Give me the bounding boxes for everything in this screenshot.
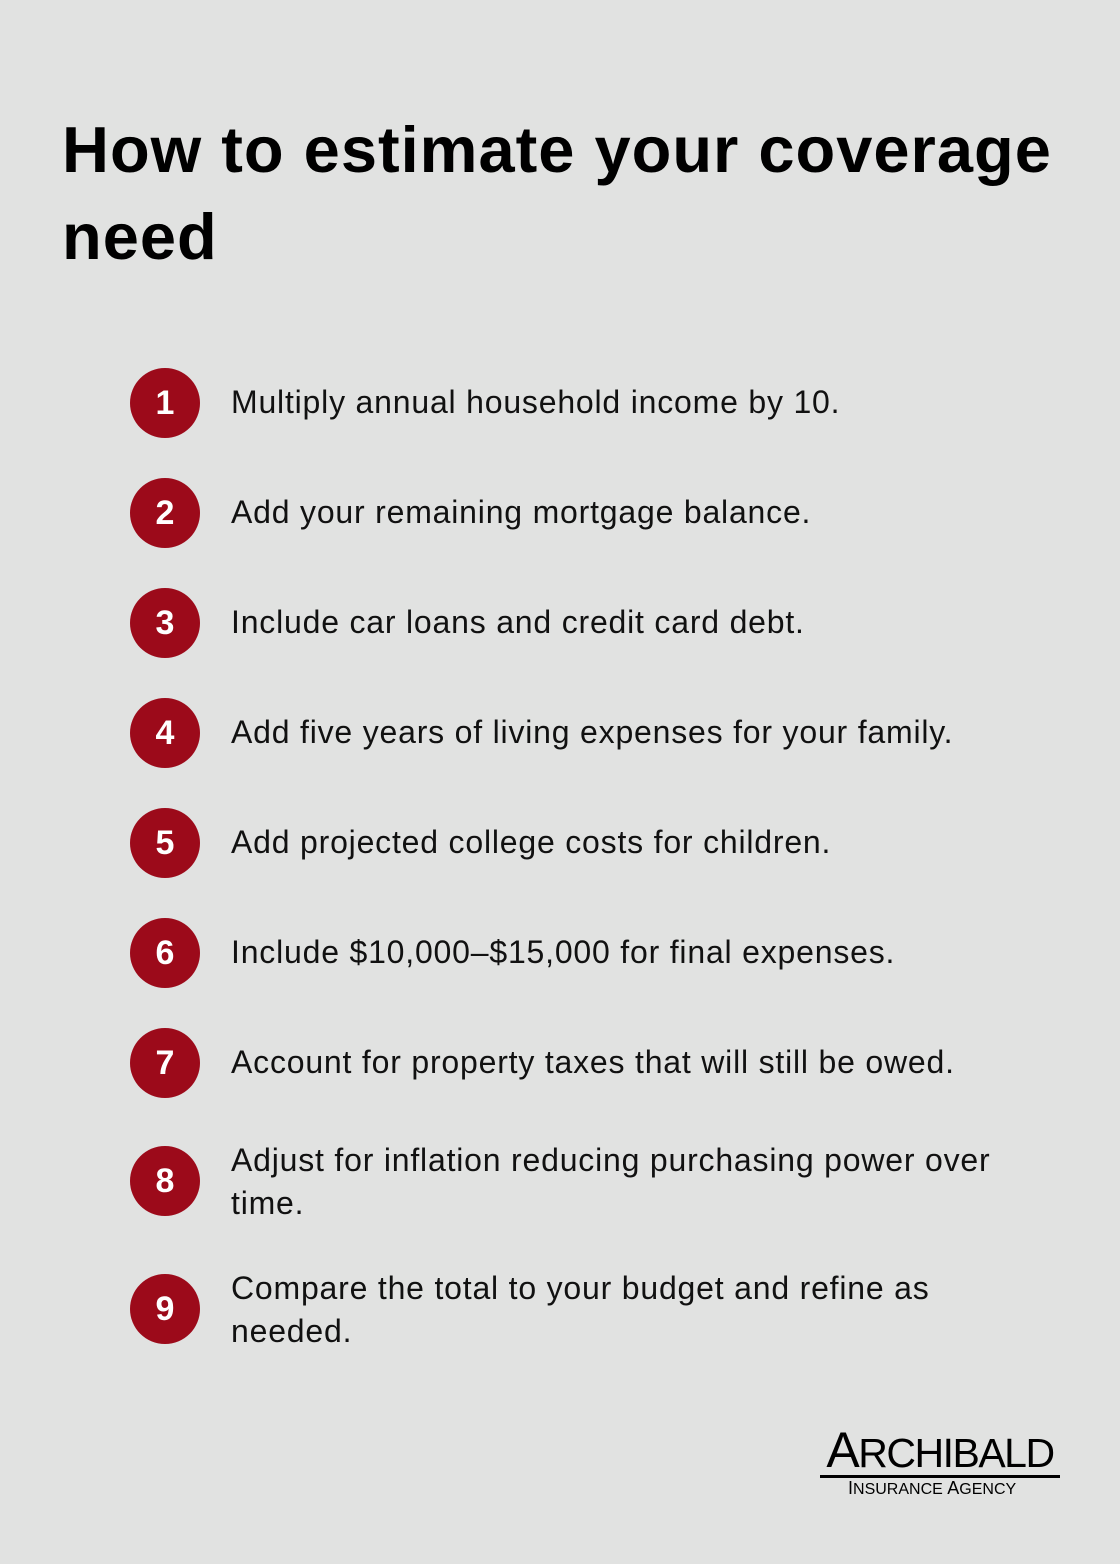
step 9 badge: 9 <box>156 1290 174 1328</box>
step 2 badge: 2 <box>156 494 174 532</box>
step 3 badge: 3 <box>156 604 174 642</box>
logo <box>820 1422 1060 1498</box>
step 5 badge <box>130 808 200 878</box>
step 7 badge: 7 <box>156 1044 174 1082</box>
title: How to estimate your coverage need <box>62 113 1052 273</box>
step 1 text: Multiply annual household income by 10. <box>231 384 840 420</box>
step 1 badge: 1 <box>156 384 174 422</box>
step 6 text: Include $10,000–$15,000 for final expenses. <box>231 934 895 970</box>
step 4 badge <box>130 698 200 768</box>
step 2 text: Add your remaining mortgage balance. <box>231 494 811 530</box>
step 4 badge: 4 <box>156 714 174 752</box>
step 9 text: Compare the total to your budget and refine as needed. <box>231 1270 930 1349</box>
step 8 text: Adjust for inflation reducing purchasing power over time. <box>231 1142 990 1221</box>
step 5 badge: 5 <box>156 824 174 862</box>
step 5 text: Add projected college costs for children. <box>231 824 831 860</box>
step 7 text: Account for property taxes that will still be owed. <box>231 1044 955 1080</box>
step 6 badge: 6 <box>156 934 174 972</box>
step 4 text: Add five years of living expenses for your family. <box>231 714 953 750</box>
logo: ARCHIBALD <box>826 1422 1054 1478</box>
step 1 badge <box>130 368 200 438</box>
step 9 badge <box>130 1274 200 1344</box>
logo: INSURANCE AGENCY <box>848 1478 1016 1498</box>
step 2 badge <box>130 478 200 548</box>
step 3 text: Include car loans and credit card debt. <box>231 604 805 640</box>
step 6 badge <box>130 918 200 988</box>
step 3 badge <box>130 588 200 658</box>
step 8 badge <box>130 1146 200 1216</box>
step 8 badge: 8 <box>156 1162 174 1200</box>
step 7 badge <box>130 1028 200 1098</box>
